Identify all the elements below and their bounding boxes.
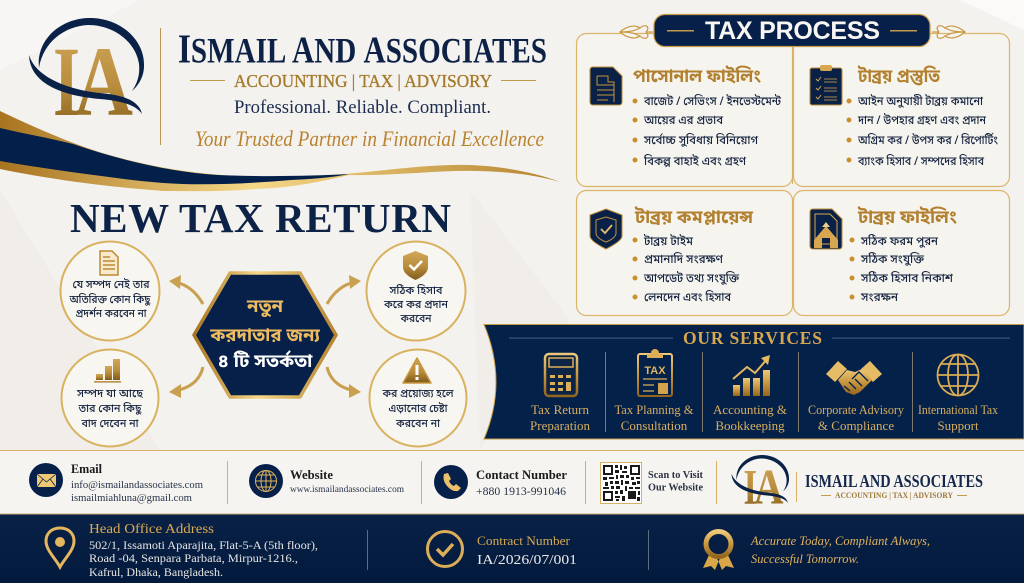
warning circle: bottom right: [370, 350, 466, 446]
service: accounting: Accounting &: [713, 402, 787, 417]
contact: phone: +880 1913-991046: [476, 484, 566, 498]
service: corporate advisory: Corporate Advisory: [808, 402, 904, 417]
contact: website: [249, 464, 405, 498]
heading: new tax return: NEW TAX RETURN: [70, 195, 451, 241]
icon: warning: [403, 358, 431, 383]
panel: personal filing: পাসোনাল ফাইলিং: [633, 66, 761, 90]
central hexagon: ৪ টি সতর্কতা: [218, 349, 313, 375]
qr code: [600, 462, 642, 504]
panel: tax preparation: আইন অনুযায়ী টাব্রয় কমানো: [857, 93, 984, 110]
contact: website: www.ismailandassociates.com: [290, 485, 405, 495]
panel: tax filing: সঠিক হিসাব নিকাশ: [860, 270, 954, 287]
panel: tax preparation: ব্যাংক হিসাব / সম্পদের হিসাব: [857, 153, 985, 170]
icon: growth chart: [733, 355, 770, 396]
company logo: [29, 18, 144, 137]
head office address: Head Office Address: [89, 522, 214, 537]
flourish: left: [620, 26, 653, 38]
tax process pill: [654, 14, 930, 46]
small company name: ISMAIL AND ASSOCIATES: [805, 471, 983, 491]
icon: file upload: [810, 209, 842, 249]
panel: tax filing: টাব্রয় ফাইলিং: [857, 207, 957, 231]
contact: website: Website: [290, 467, 333, 482]
slogan: Professional. Reliable. Compliant.: [234, 97, 491, 118]
panel: personal filing: আয়ের এর প্রভাব: [643, 113, 724, 129]
panel: our services: [484, 324, 1024, 439]
warning circle: bottom right: এড়ানোর চেষ্টা: [388, 402, 448, 417]
scan label: Scan to Visit: [648, 470, 703, 481]
warning circle: bottom left: বাদ দেবেন না: [81, 418, 139, 432]
service: corporate advisory: [808, 361, 904, 433]
logo letters: I: [53, 26, 80, 137]
warning circle: top right: [366, 242, 466, 340]
central hexagon: [194, 273, 336, 397]
panel: tax compliance: [576, 190, 792, 316]
scan label: Our Website: [648, 482, 703, 494]
head office address: Kafrul, Dhaka, Bangladesh.: [89, 567, 223, 579]
central hexagon: করদাতার জন্য: [209, 324, 321, 349]
contact bar: [0, 450, 1024, 514]
service: tax return preparation: [530, 354, 590, 433]
icon: globe: [938, 354, 978, 396]
icon: globe: [256, 470, 276, 492]
panel: tax preparation: দান / উপহার গ্রহণ এবং প্রদান: [857, 112, 987, 129]
icon: phone: [443, 473, 461, 491]
contact: email: info@ismailandassociates.com: [71, 479, 203, 491]
service: tax planning: Tax Planning &: [614, 402, 694, 417]
small tagline: ACCOUNTING | TAX | ADVISORY: [835, 491, 953, 500]
header swoosh: [0, 111, 560, 191]
warning circle: bottom left: সম্পদ যা আছে: [76, 388, 143, 402]
tagline: accounting tax advisory: ACCOUNTING | TAX | ADVISORY: [234, 71, 492, 91]
panel: tax compliance: আপডেট তথ্য সংযুক্তি: [643, 270, 739, 287]
warning circle: top left: প্রদর্শন করবেন না: [76, 306, 147, 322]
logo swoosh: [29, 55, 142, 114]
head office address: [89, 522, 318, 579]
service: tax return preparation: Preparation: [530, 418, 590, 433]
icon: award ribbon: [703, 532, 734, 570]
icon: clipboard: [810, 65, 842, 105]
contract number: Contract Number: [477, 534, 571, 548]
arrows: [169, 275, 361, 398]
services heading: OUR SERVICES: [683, 328, 822, 348]
icon: bars: [94, 359, 121, 382]
panel: tax filing: সঠিক ফরম পুরন: [860, 233, 939, 250]
contact: email: Email: [71, 461, 102, 476]
panel: tax filing: সংরক্ষন: [860, 290, 899, 306]
panel: tax preparation: অগ্রিম কর / উপস কর / রিপোর্টিং: [857, 132, 999, 149]
contact: email: [29, 461, 203, 504]
service: accounting: Bookkeeping: [715, 418, 785, 433]
panel: tax compliance: টাব্রয় কমপ্লায়েন্স: [634, 207, 753, 231]
icon: check circle: [428, 532, 462, 566]
panel: personal filing: বাজেট / সেভিংস / ইনভেস্টমেন্ট: [643, 93, 782, 110]
warning circle: top right: করে কর প্রদান: [383, 299, 448, 313]
icon: envelope: [37, 474, 56, 487]
service: tax planning: [614, 349, 694, 433]
central hexagon: নতুন: [246, 295, 283, 320]
script tagline: Your Trusted Partner in Financial Excellence: [195, 126, 544, 151]
logo arc: [39, 18, 144, 91]
service: international tax: International Tax: [918, 402, 998, 417]
service: tax return preparation: Tax Return: [531, 402, 589, 417]
warning circle: bottom right: করবেন না: [395, 418, 441, 432]
head office address: Road -04, Senpara Parbata, Mirpur-1216.,: [89, 553, 298, 565]
panel: tax compliance: লেনদেন এবং হিসাব: [644, 289, 732, 306]
header divider: [160, 28, 161, 145]
warning circle: top left: অতিরিক্ত কোন কিছু: [69, 293, 151, 308]
panel: personal filing: বিকল্প বাহাই এবং গ্রহণ: [643, 153, 746, 170]
warning circle: bottom left: তার কোন কিছু: [78, 402, 142, 417]
small logo: [732, 455, 983, 514]
contact: email: ismailmiahluna@gmail.com: [71, 492, 192, 504]
contract number: [477, 534, 577, 567]
panel: tax filing: সঠিক সংযুক্তি: [860, 251, 925, 268]
icon: tax clipboard: TAX: [644, 365, 666, 377]
panel: tax compliance: প্রমানাদি সংরক্ষণ: [644, 251, 723, 268]
closing slogan: Successful Tomorrow.: [751, 551, 859, 566]
logo mark: A: [754, 458, 784, 514]
panel: tax filing: [794, 190, 1010, 316]
icon: map pin: [46, 528, 74, 567]
contract number: IA/2026/07/001: [477, 552, 577, 567]
icon: document: [100, 251, 118, 275]
warning circle: bottom left: [62, 350, 158, 446]
logo mark: [732, 455, 789, 514]
logo letters: A: [74, 26, 133, 137]
icon: handshake: [826, 361, 882, 395]
contact: phone: Contact Number: [476, 467, 567, 482]
contact: phone: [434, 465, 567, 499]
warning circle: bottom right: কর প্রয়োজ্য হলে: [382, 388, 454, 402]
panel: tax preparation: টাব্রয় প্রস্তুতি: [857, 66, 940, 90]
warning circle: top left: যে সম্পদ নেই তার: [72, 278, 150, 293]
service: accounting: [713, 355, 787, 433]
service: international tax: [918, 354, 998, 433]
warning circle: top left: [60, 242, 160, 340]
head office address: 502/1, Issamoti Aparajita, Flat-5-A (5th floor),: [89, 540, 318, 552]
icon: document: [590, 67, 622, 105]
icon: shield: [590, 209, 622, 249]
footer bar: [0, 514, 1024, 583]
warning circle: top right: করবেন: [400, 313, 432, 327]
service: international tax: Support: [937, 418, 979, 433]
service: tax planning: Consultation: [621, 418, 688, 433]
icon: calculator: [545, 354, 577, 396]
icon: shield: [403, 251, 428, 280]
company name: ISMAIL AND ASSOCIATES: [178, 26, 547, 72]
logo letters: [53, 26, 133, 137]
logo mark: I: [744, 458, 757, 514]
panel: personal filing: সর্বোচ্চ সুবিধায় বিনিয়োগ: [643, 132, 759, 149]
panel: tax preparation: [792, 34, 1010, 186]
tax process pill: TAX PROCESS: [705, 17, 880, 45]
panel: personal filing: [576, 34, 792, 186]
warning circle: top right: সঠিক হিসাব: [389, 284, 443, 299]
closing slogan: Accurate Today, Compliant Always,: [750, 533, 930, 548]
flourish: right: [932, 26, 965, 38]
service: corporate advisory: & Compliance: [818, 418, 894, 433]
panel: tax compliance: টাব্রয় টাইম: [643, 233, 694, 250]
